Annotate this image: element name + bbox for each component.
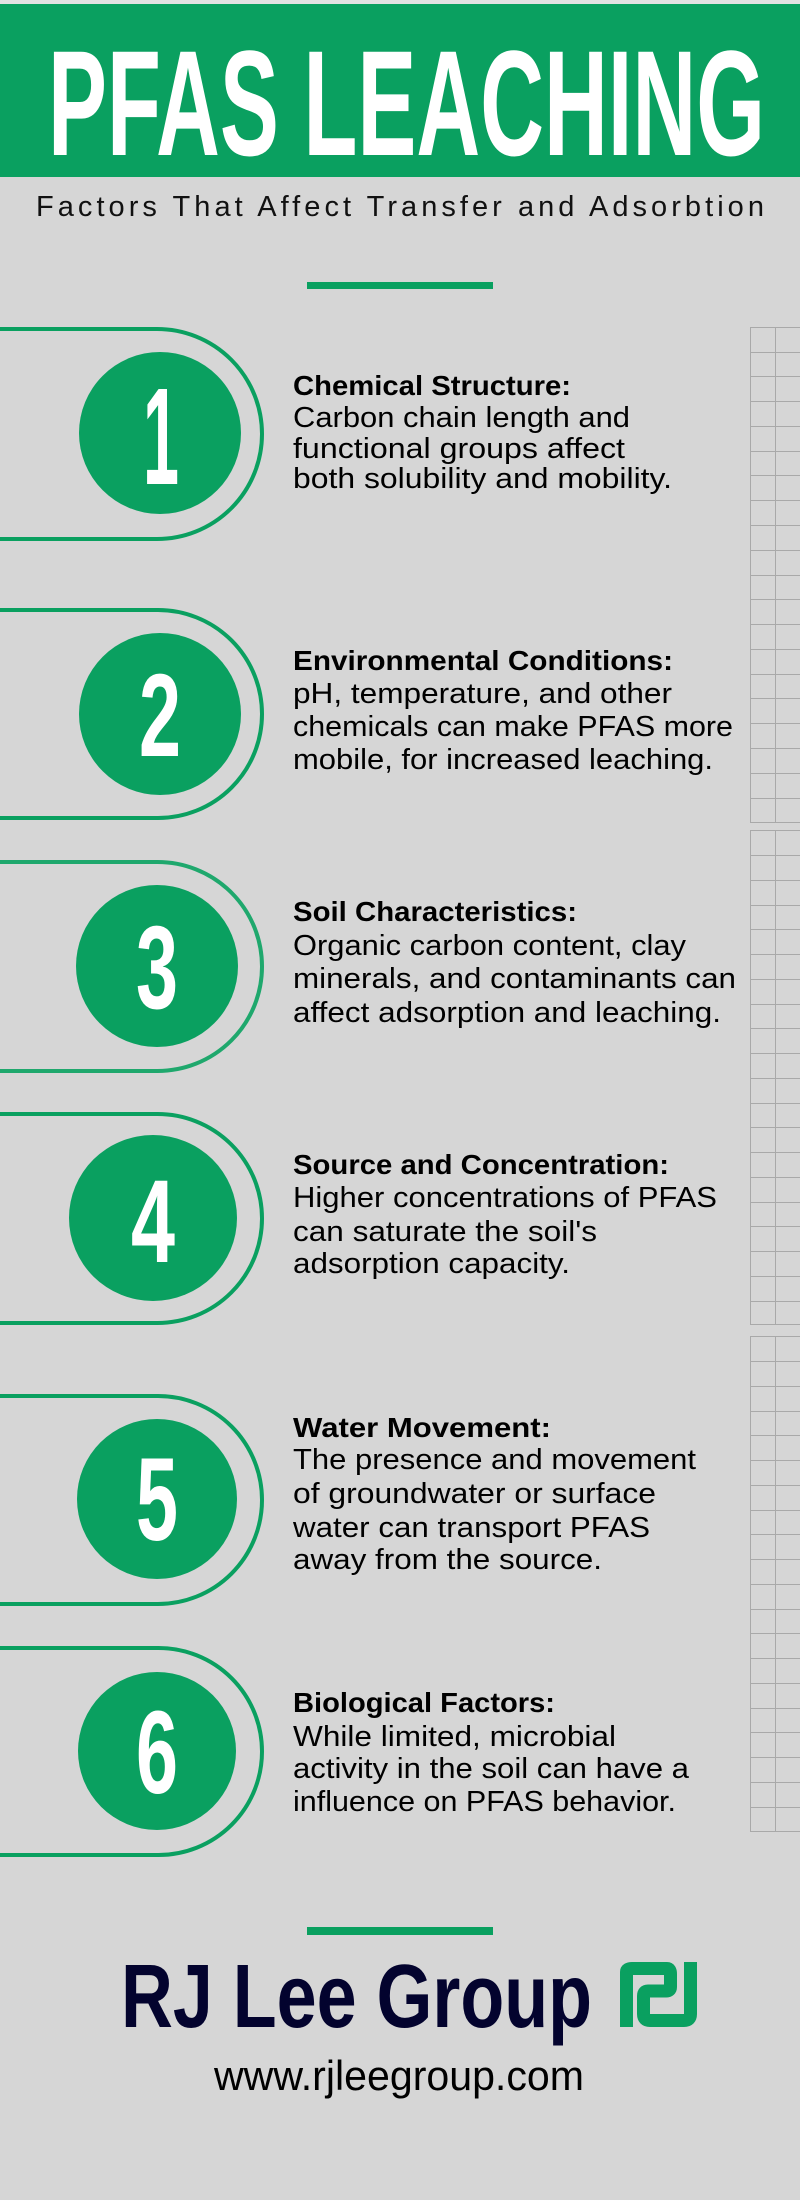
- text block 2: mobile, for increased leaching.: [293, 744, 713, 776]
- number circle 3: [76, 885, 238, 1047]
- text block 5: water can transport PFAS: [292, 1512, 650, 1544]
- number circle 6: 6: [136, 1687, 178, 1819]
- text block 1: both solubility and mobility.: [293, 463, 672, 495]
- text block 4: can saturate the soil's: [293, 1216, 597, 1248]
- text block 4: adsorption capacity.: [293, 1248, 570, 1280]
- number circle 1: [79, 352, 241, 514]
- text block 5: away from the source.: [293, 1544, 602, 1576]
- panel: item 5 water movement: [0, 1396, 696, 1604]
- panel: item 2 environmental conditions: [0, 610, 733, 818]
- text block 1: functional groups affect: [293, 433, 625, 465]
- text block 1: Chemical Structure:: [293, 370, 571, 401]
- text block 2: pH, temperature, and other: [293, 678, 672, 710]
- text block 3: [293, 896, 736, 1029]
- bottom divider: [307, 1927, 493, 1935]
- text block 6: activity in the soil can have a: [293, 1753, 690, 1785]
- text block 1: Carbon chain length and: [293, 402, 630, 434]
- number circle 6: [78, 1672, 236, 1830]
- top divider: [307, 282, 493, 289]
- text block 5: of groundwater or surface: [293, 1478, 656, 1510]
- icon: RJ Lee logo mark: [626, 1962, 690, 2027]
- website url: www.rjleegroup.com: [213, 2052, 584, 2099]
- text block 4: Higher concentrations of PFAS: [293, 1182, 717, 1214]
- number circle 5: 5: [136, 1434, 178, 1566]
- number circle 4: 4: [131, 1156, 175, 1288]
- text block 5: Water Movement:: [293, 1412, 551, 1443]
- panel: item 6 biological factors: [0, 1648, 690, 1855]
- grid decoration: [750, 327, 800, 1832]
- number circle 4: [69, 1135, 237, 1301]
- text block 5: The presence and movement: [293, 1444, 696, 1476]
- panel: item 3 soil characteristics: [0, 862, 736, 1071]
- number circle 3: 3: [136, 902, 178, 1034]
- text block 4: [293, 1149, 717, 1280]
- text block 1: [293, 370, 672, 495]
- text block 6: Biological Factors:: [293, 1687, 555, 1718]
- text block 2: [293, 645, 733, 776]
- panel: item 1 chemical structure: [0, 329, 672, 539]
- number circle 2: 2: [139, 650, 181, 782]
- text block 2: chemicals can make PFAS more: [293, 711, 733, 743]
- text block 4: Source and Concentration:: [293, 1149, 669, 1180]
- header banner: [0, 4, 800, 187]
- text block 3: Organic carbon content, clay: [293, 930, 687, 962]
- text block 3: Soil Characteristics:: [293, 896, 577, 927]
- text block 6: influence on PFAS behavior.: [293, 1786, 676, 1818]
- text block 2: Environmental Conditions:: [293, 645, 673, 676]
- footer logo wordmark: RJ Lee Group: [121, 1947, 592, 2047]
- number circle 2: [79, 633, 241, 795]
- text block 5: [292, 1412, 696, 1576]
- number circle 1: 1: [143, 360, 179, 514]
- panel: item 4 source and concentration: [0, 1114, 717, 1323]
- subtitle: Factors That Affect Transfer and Adsorbtion: [36, 191, 764, 223]
- text block 6: While limited, microbial: [293, 1721, 616, 1753]
- number circle 5: [77, 1419, 237, 1579]
- text block 6: [293, 1687, 690, 1818]
- text block 3: affect adsorption and leaching.: [293, 997, 721, 1029]
- text block 3: minerals, and contaminants can: [293, 963, 736, 995]
